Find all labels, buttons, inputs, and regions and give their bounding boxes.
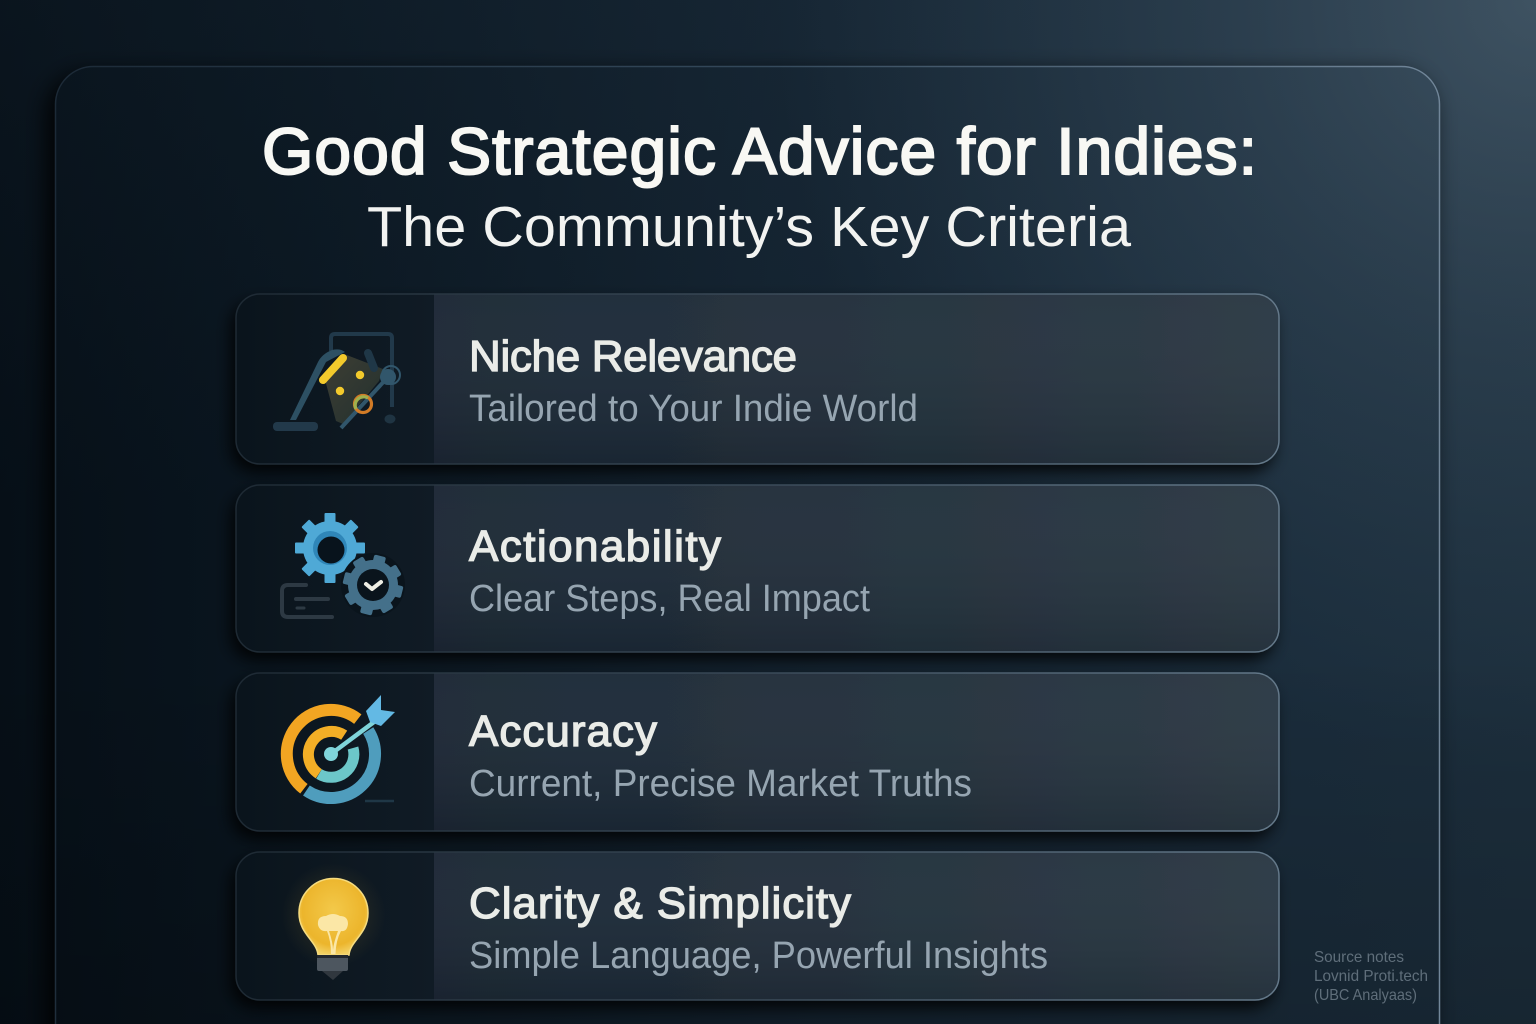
heading line 1: Good Strategic Advice for Indies: [262, 114, 1257, 188]
heading: Accuracy [469, 707, 657, 756]
panel: Clarity & Simplicity [236, 852, 1279, 1000]
icon: light bulb [281, 863, 385, 980]
source notes [1314, 949, 1428, 1004]
icon: target with arrow [287, 695, 395, 801]
subheading: Clear Steps, Real Impact [469, 578, 870, 620]
source notes: (UBC Analyaas) [1314, 987, 1417, 1004]
panel: Actionability [236, 485, 1279, 652]
source notes: Lovnid Proti.tech [1314, 968, 1428, 985]
heading line 2: The Community’s Key Criteria [367, 195, 1131, 259]
subheading: Simple Language, Powerful Insights [469, 935, 1048, 977]
icon: gears with check [282, 513, 405, 617]
subheading: Tailored to Your Indie World [469, 388, 918, 430]
heading: Clarity & Simplicity [469, 879, 851, 928]
source notes: Source notes [1314, 949, 1404, 966]
panel: Niche Relevance [236, 294, 1279, 464]
subheading: Current, Precise Market Truths [469, 763, 972, 805]
panel: Accuracy [236, 673, 1279, 831]
heading: Niche Relevance [469, 332, 797, 381]
icon: lamp and pin [273, 334, 400, 431]
heading: Actionability [469, 522, 721, 571]
title [262, 114, 1257, 259]
